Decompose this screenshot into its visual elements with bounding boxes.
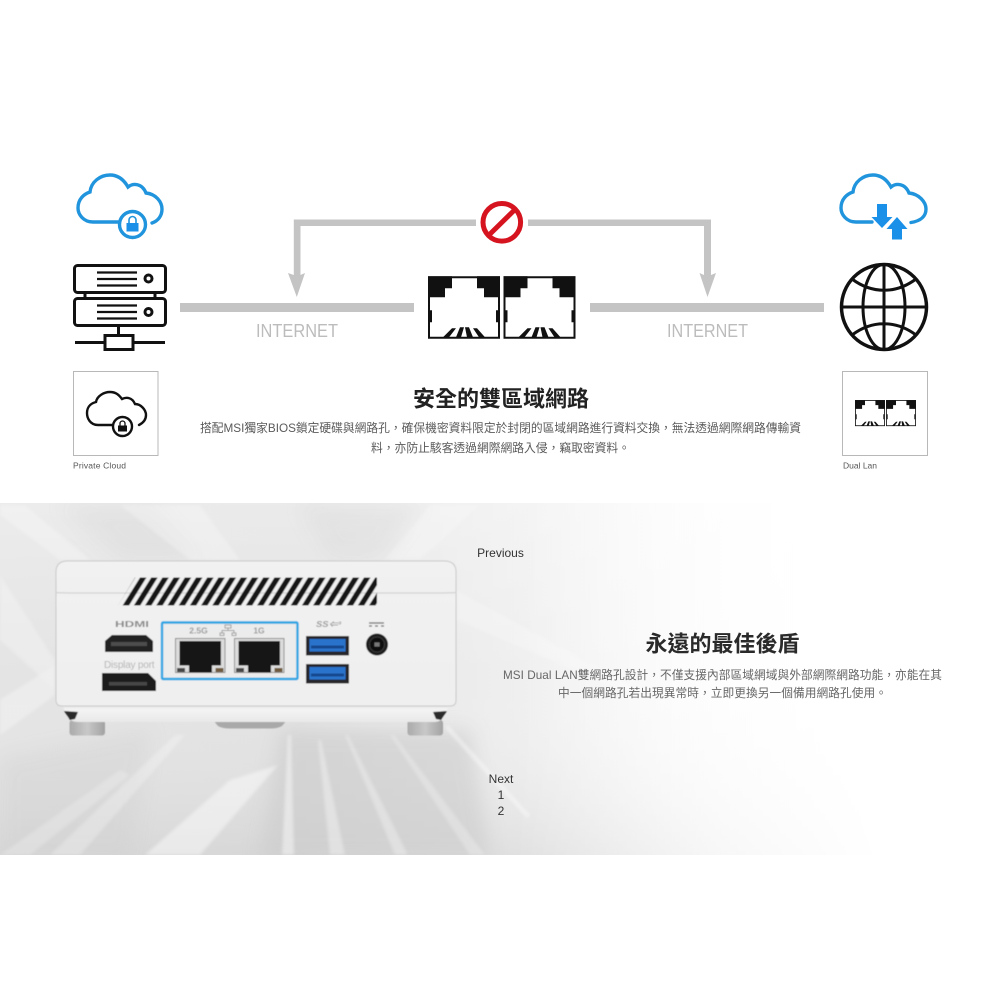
text block: secure network description: 搭配MSI獨家BIOS鎖定硬碟與網路孔，確保機密資料限定於封閉的區域網路進行資料交換，無法透過網際網路傳輸資 xyxy=(200,421,801,435)
panel: lower background band xyxy=(0,503,728,855)
icon: server rack xyxy=(74,266,166,350)
label: left internet: INTERNET xyxy=(256,321,338,341)
icon: blue cloud with lock xyxy=(78,175,162,238)
text block: secure network description xyxy=(200,421,801,455)
SuperSpeed label: SS⇐³ xyxy=(316,620,341,629)
DC symbol xyxy=(369,623,384,626)
caption: private cloud: Private Cloud xyxy=(73,460,126,470)
nav: previous: Previous xyxy=(477,546,524,560)
nav: next and pagination: 1 xyxy=(498,788,505,802)
text block: backup description xyxy=(503,668,942,700)
card: private cloud xyxy=(74,372,158,456)
heading: secure dual zone network: 安全的雙區域網路 xyxy=(413,386,589,412)
icon: blue cloud with transfer arrows xyxy=(841,175,926,240)
icon: globe xyxy=(842,264,926,350)
illustration: mini PC rear view xyxy=(56,561,456,736)
connector: right internet line xyxy=(590,303,824,312)
HDMI label: HDMI xyxy=(115,620,149,629)
icon: prohibited sign xyxy=(483,204,521,241)
LAN port: 2.5G xyxy=(176,638,225,672)
nav: next and pagination: Next xyxy=(489,772,514,786)
label: right internet: INTERNET xyxy=(667,321,748,341)
USB port: lower xyxy=(306,664,349,684)
icon: network symbol xyxy=(220,625,236,636)
arrow: blocked path to left internet line xyxy=(288,220,476,297)
Display port label: Display port xyxy=(104,660,155,671)
text block: secure network description: 料，亦防止駭客透過網際網路入侵，竊取密資料。 xyxy=(371,441,630,455)
corner vents xyxy=(64,711,447,720)
nav: next and pagination: 2 xyxy=(498,804,505,818)
text block: backup description: MSI Dual LAN雙網路孔設計，不僅支援內部區域網域與外部網際網路功能，亦能在其 xyxy=(503,668,942,682)
arrow: blocked path to right internet line xyxy=(528,220,716,297)
chassis seam xyxy=(56,592,456,594)
icon: dual LAN ports xyxy=(428,276,576,338)
label: 2.5G: 2.5G xyxy=(189,626,208,636)
text block: backup description: 中一個網路孔若出現異常時，立即更換另一個備用網路孔使用。 xyxy=(558,686,887,700)
vent slots xyxy=(118,578,377,606)
heading: always the best backup: 永遠的最佳後盾 xyxy=(645,632,800,656)
card: dual lan xyxy=(842,372,928,456)
icon: small dual LAN ports xyxy=(855,400,916,426)
nav: next and pagination xyxy=(489,772,514,818)
chassis body xyxy=(56,561,456,706)
base plate xyxy=(62,704,450,722)
Display port connector xyxy=(102,673,156,691)
DC jack xyxy=(366,634,388,656)
feet and underside xyxy=(70,720,443,736)
highlight: dual LAN ports frame xyxy=(162,622,298,679)
caption: dual lan: Dual Lan xyxy=(843,460,877,470)
LAN port: 1G xyxy=(234,638,284,672)
USB port: upper xyxy=(306,636,349,656)
panel: network diagram xyxy=(73,175,928,470)
icon: black cloud with lock xyxy=(87,392,146,436)
HDMI port xyxy=(105,635,153,652)
connector: left internet line xyxy=(180,303,414,312)
label: 1G: 1G xyxy=(253,626,265,636)
